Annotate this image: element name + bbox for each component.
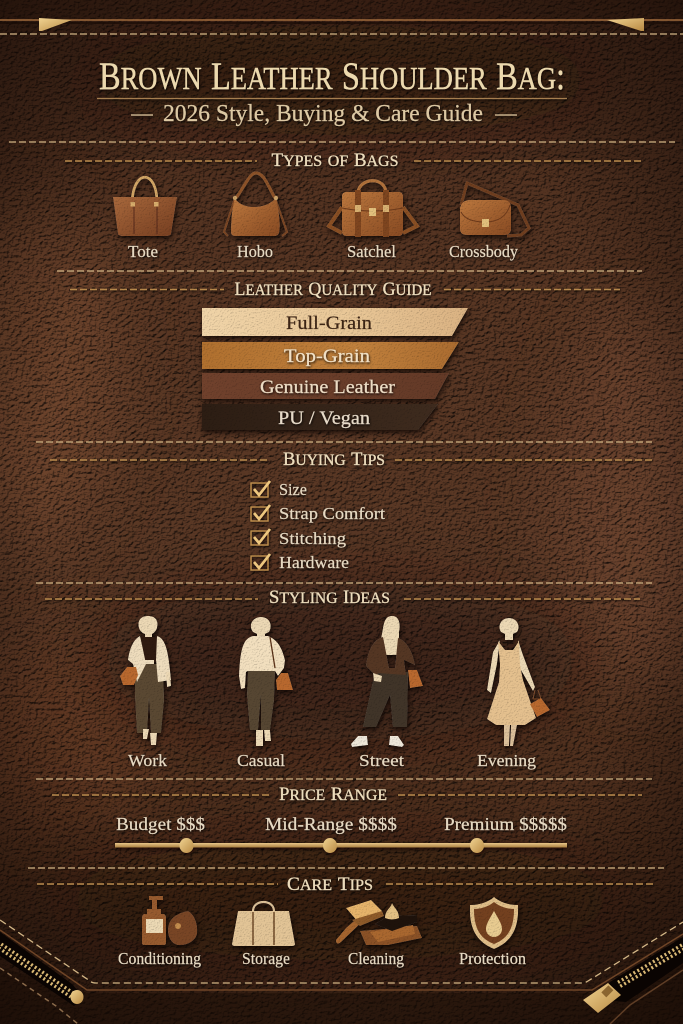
bar: full-grain: Full-Grain [286,313,373,334]
title: Brown Leather Shoulder Bag: [99,49,565,99]
price labels: Premium $$$$$ [444,814,567,834]
labels: care tips: Cleaning [348,949,404,968]
price labels [116,814,567,834]
panel: styling figures [120,616,550,747]
figure: evening [487,618,550,746]
icon: cleaning brush and cloths [336,900,422,945]
icon: protection shield [470,897,518,949]
heading: price range: Price Range [279,780,387,805]
price labels: Mid-Range $$$$ [265,814,397,834]
figure: street [351,616,423,747]
heading: styling ideas: Styling Ideas [269,583,390,608]
labels: styling: Evening [477,751,537,770]
figure: casual [239,617,293,746]
panel: bag types [113,173,529,237]
labels: care tips: Protection [459,949,526,968]
icon: satchel bag [329,181,417,237]
checklist: buying tips [251,480,385,572]
labels: bag types: Hobo [237,242,273,261]
panel: care icons [142,896,518,949]
bar: top-grain: Top-Grain [284,346,371,367]
icon: conditioner bottle and pad [142,896,197,945]
checklist: buying tips: Hardware [279,553,349,572]
bar: genuine leather [202,373,449,399]
labels: bag types [128,242,518,261]
checklist: buying tips: Size [279,480,307,499]
price labels: Budget $$$ [116,814,205,834]
bar: top-grain [202,342,459,369]
chart: price range slider [115,814,567,853]
checklist: buying tips: Stitching [279,529,347,548]
checklist: buying tips: Strap Comfort [279,504,385,523]
bar: full-grain [202,308,468,336]
heading: buying tips: Buying Tips [283,445,385,470]
bar: pu vegan [202,404,438,430]
bar: pu vegan: PU / Vegan [278,408,371,429]
labels: styling: Street [359,751,404,770]
labels: styling [128,751,537,770]
zipper: right [583,937,683,1024]
labels: care tips: Storage [242,949,290,968]
chart: leather quality bars [202,308,468,430]
labels: styling: Work [128,751,168,770]
labels: care tips: Conditioning [118,949,201,968]
icon: tote bag [113,177,177,236]
zipper: left [0,932,84,1024]
slider track and markers [115,838,567,853]
labels: styling: Casual [237,751,285,770]
labels: bag types: Satchel [347,242,396,261]
bar: genuine leather: Genuine Leather [260,377,396,398]
icon: storage bag [232,902,295,946]
subtitle: 2026 Style, Buying & Care Guide [163,101,483,127]
heading: leather quality guide: Leather Quality Guide [234,275,432,300]
labels: care tips [118,949,526,968]
icon: hobo bag [224,173,287,236]
heading: types of bags: Types of Bags [272,146,398,171]
labels: bag types: Tote [128,242,158,261]
figure: work [120,616,171,745]
top seam with gold corners [0,0,683,34]
icon: crossbody bag [460,183,529,236]
heading: care tips: Care Tips [287,870,373,895]
bottom flap seam and stitching [0,920,683,1024]
labels: bag types: Crossbody [449,242,518,261]
